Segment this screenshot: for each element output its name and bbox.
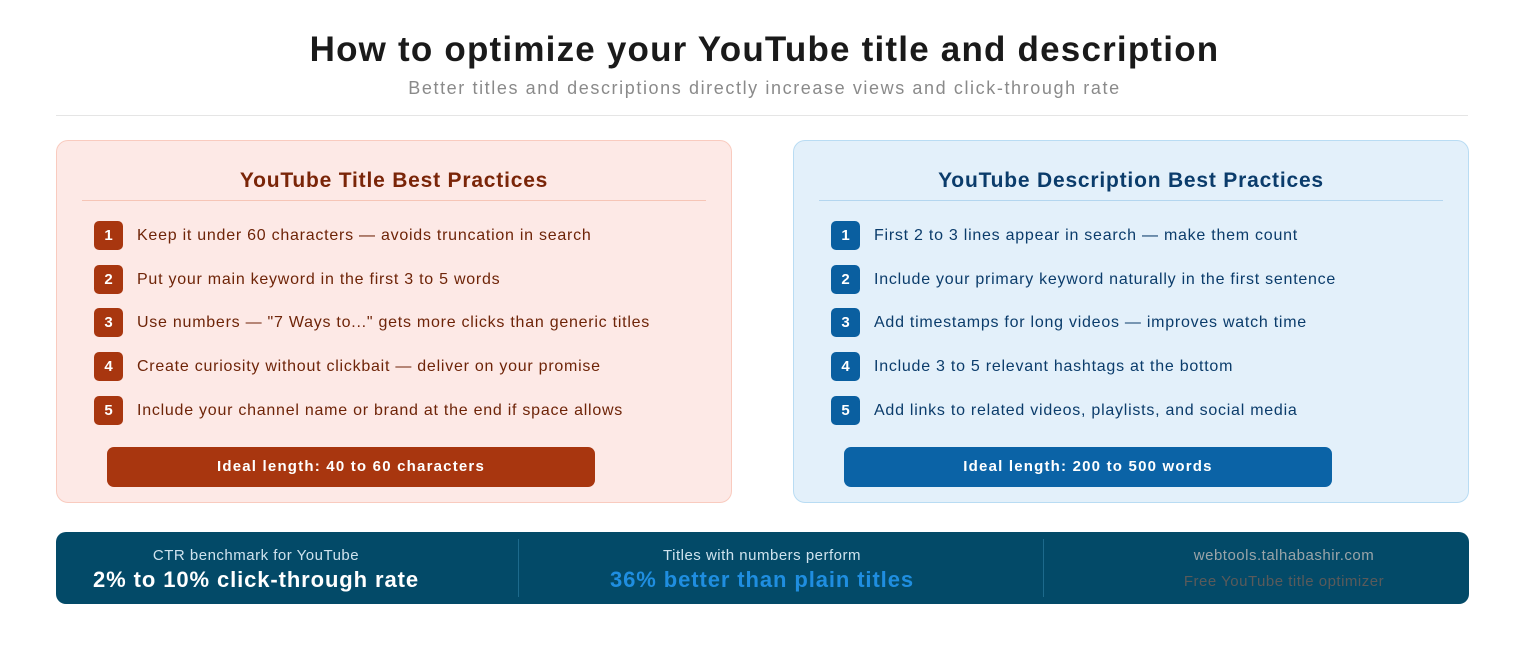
item 5	[831, 396, 1298, 425]
item 4	[94, 352, 601, 381]
item 3: 3	[104, 314, 113, 331]
item 2: 2	[841, 271, 850, 288]
item 1: Keep it under 60 characters — avoids truncation in search	[137, 227, 592, 244]
item 4: 4	[104, 358, 113, 375]
button: ideal length	[844, 447, 1332, 487]
button: ideal length: Ideal length: 200 to 500 words	[963, 458, 1213, 475]
stat: CTR benchmark: 2% to 10% click-through rate	[93, 567, 419, 592]
item 1: 1	[841, 227, 850, 244]
item 2: Put your main keyword in the first 3 to 5 words	[137, 271, 500, 288]
credit: webtools.talhabashir.com	[1194, 547, 1374, 564]
stat: CTR benchmark: CTR benchmark for YouTube	[153, 547, 359, 564]
button: ideal length: Ideal length: 40 to 60 characters	[217, 458, 485, 475]
item 4: Create curiosity without clickbait — deliver on your promise	[137, 358, 601, 375]
stats bar	[56, 532, 1469, 604]
heading: YouTube Title Best Practices	[240, 169, 548, 192]
item 1: First 2 to 3 lines appear in search — make them count	[874, 227, 1298, 244]
item 3: 3	[841, 314, 850, 331]
item 3: Use numbers — "7 Ways to..." gets more clicks than generic titles	[137, 314, 650, 331]
button: ideal length	[107, 447, 595, 487]
item 5: 5	[104, 402, 113, 419]
subtitle: Better titles and descriptions directly increase views and click-through rate	[408, 78, 1121, 98]
item 2	[831, 265, 1336, 294]
stat: numbers in titles: 36% better than plain titles	[610, 567, 914, 592]
item 5: Include your channel name or brand at the end if space allows	[137, 402, 623, 419]
item 2: 2	[104, 271, 113, 288]
credit	[1184, 547, 1384, 590]
stat: CTR benchmark	[93, 547, 419, 592]
panel: description best practices	[793, 140, 1469, 503]
item 2: Include your primary keyword naturally in the first sentence	[874, 271, 1336, 288]
item 2	[94, 265, 500, 294]
item 1: 1	[104, 227, 113, 244]
item 3	[831, 308, 1307, 337]
item 5: Add links to related videos, playlists, and social media	[874, 402, 1298, 419]
panel: title best practices	[56, 140, 732, 503]
item 3: Add timestamps for long videos — improves watch time	[874, 314, 1307, 331]
item 4: Include 3 to 5 relevant hashtags at the bottom	[874, 358, 1233, 375]
title: How to optimize your YouTube title and description	[310, 30, 1219, 69]
item 5: 5	[841, 402, 850, 419]
stat: numbers in titles: Titles with numbers perform	[663, 547, 861, 564]
item 4: 4	[841, 358, 850, 375]
item 5	[94, 396, 623, 425]
stat: numbers in titles	[610, 547, 914, 592]
item 4	[831, 352, 1233, 381]
item 1	[94, 221, 592, 250]
credit: Free YouTube title optimizer	[1184, 573, 1384, 590]
item 3	[94, 308, 650, 337]
heading: YouTube Description Best Practices	[938, 169, 1324, 192]
item 1	[831, 221, 1298, 250]
